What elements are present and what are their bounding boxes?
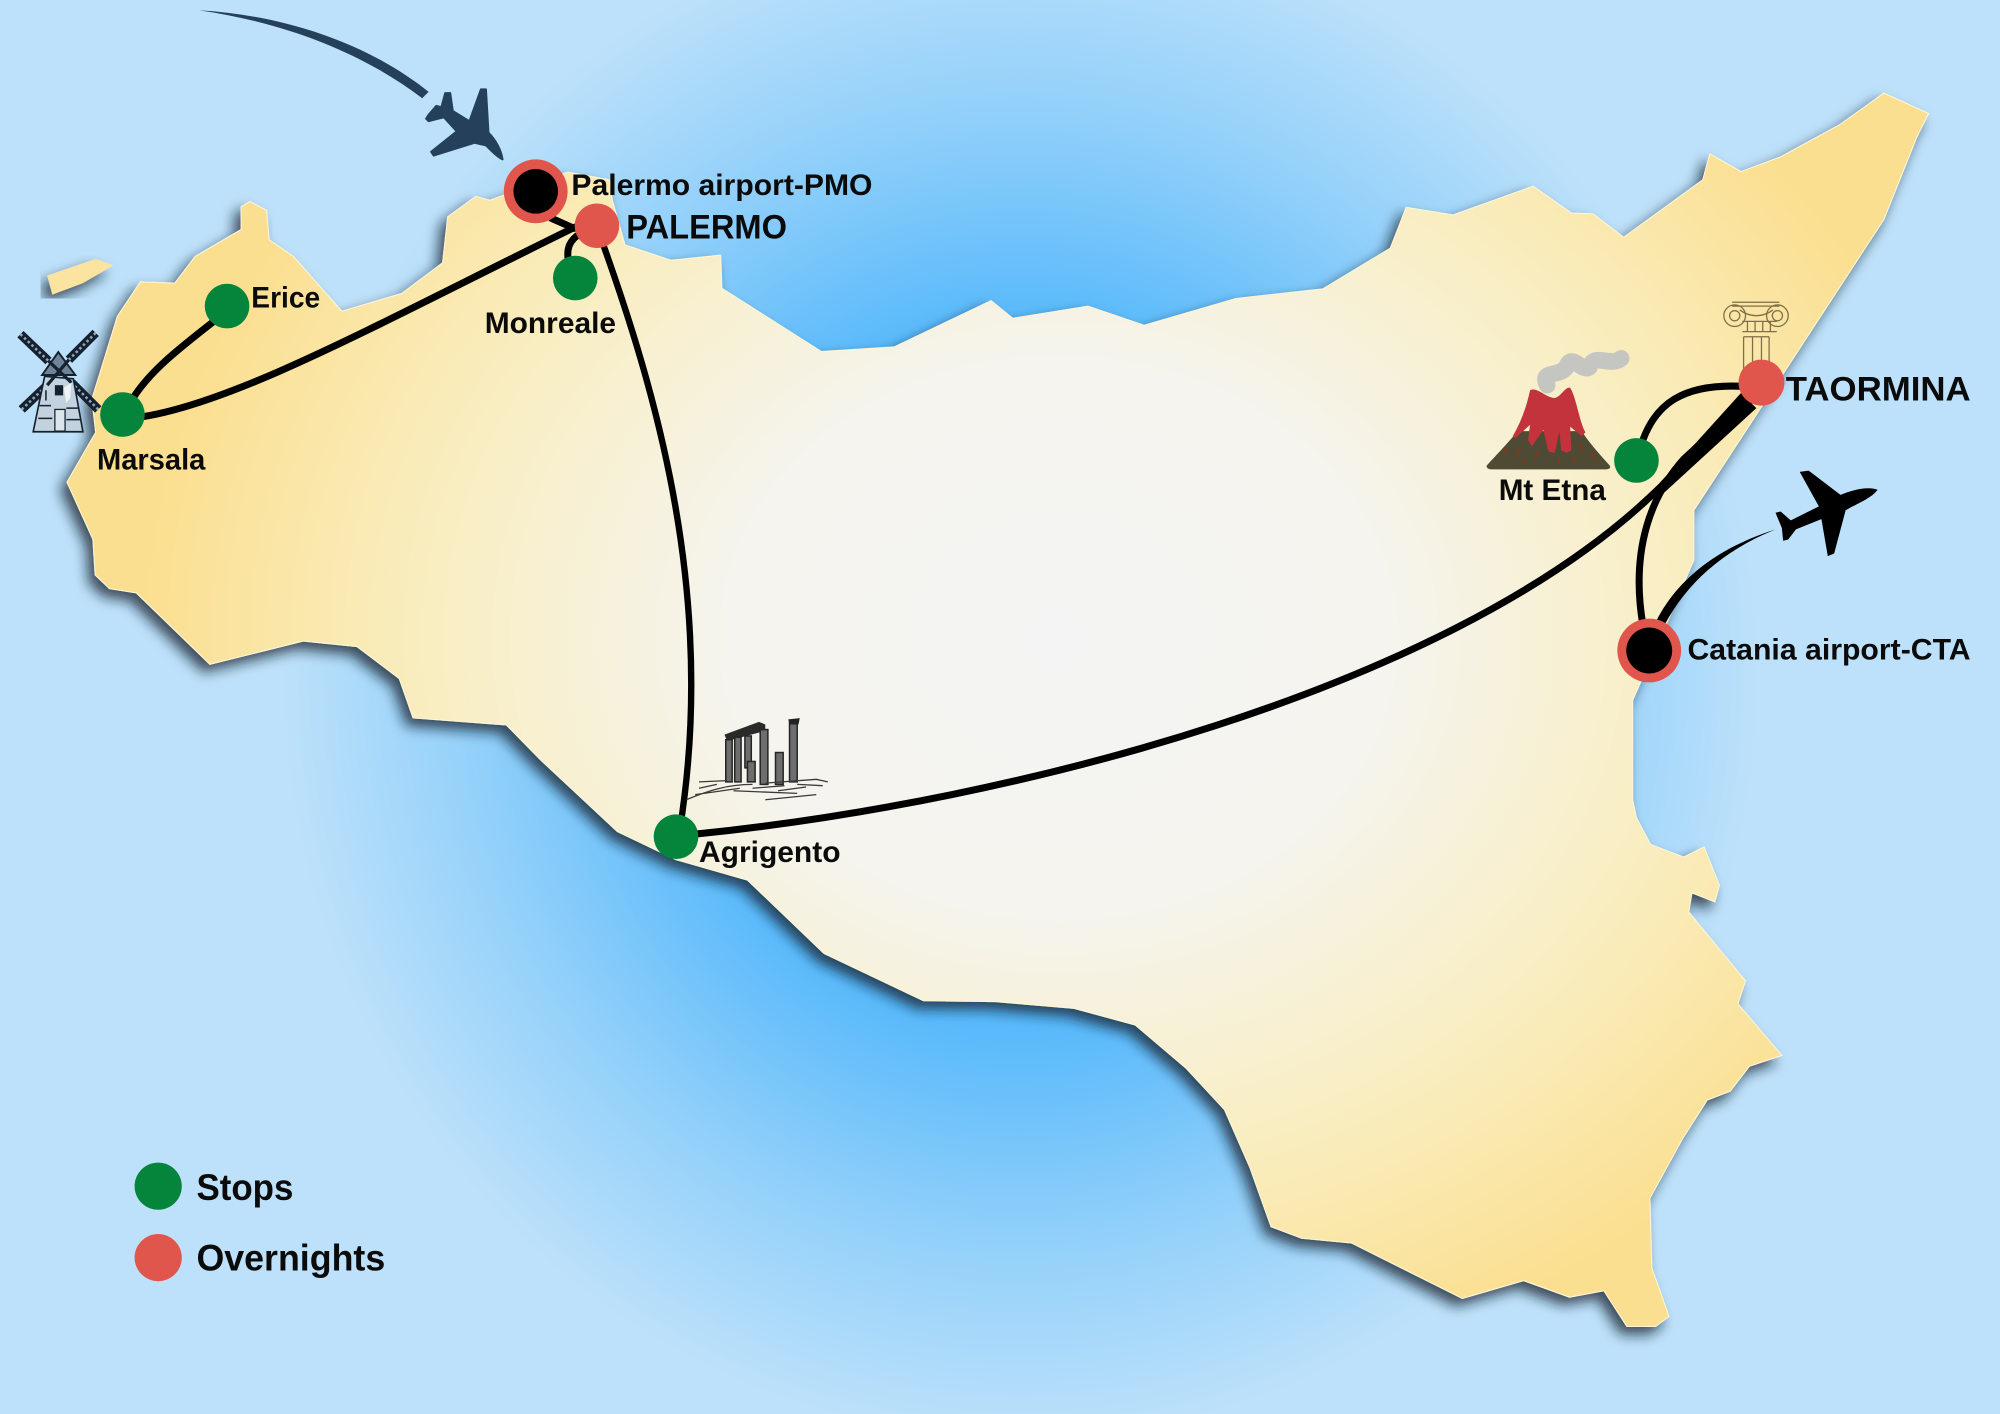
- marker: Catania airport: [1617, 619, 1681, 682]
- legend: overnights: [135, 1234, 385, 1281]
- legend: overnights: Overnights: [196, 1237, 385, 1278]
- marker: Palermo overnight: [575, 203, 619, 248]
- label: Monreale: Monreale: [485, 307, 616, 340]
- icon: windmill at Marsala: [20, 333, 98, 432]
- legend: stops: Stops: [196, 1167, 293, 1208]
- label: Erice: Erice: [251, 281, 320, 314]
- map: small island off the west coast: [47, 259, 114, 295]
- marker: Marsala stop: [100, 392, 145, 437]
- label: Catania airport: Catania airport-CTA: [1687, 633, 1971, 666]
- route: Catania to Taormina: [1639, 398, 1750, 625]
- icon: plane arriving at Palermo: [426, 89, 503, 159]
- label: Palermo: PALERMO: [626, 209, 787, 247]
- marker: Palermo airport: [504, 159, 568, 223]
- flight trail: departing Catania: [1657, 529, 1775, 625]
- label: Taormina: TAORMINA: [1786, 371, 1971, 409]
- marker: Erice stop: [205, 284, 249, 328]
- label: Palermo airport: Palermo airport-PMO: [571, 169, 872, 202]
- route: Palermo to Agrigento: [603, 245, 691, 829]
- route: merged wedge near Taormina: [1658, 393, 1756, 492]
- label: Marsala: Marsala: [97, 443, 206, 476]
- route: Marsala to Palermo: [140, 227, 575, 417]
- route: Monreale to Palermo: [568, 233, 580, 260]
- route: Palermo airport to Palermo: [551, 218, 574, 228]
- label: Agrigento: Agrigento: [699, 836, 841, 869]
- route: Mt Etna to Taormina: [1643, 386, 1745, 440]
- icon: Greek temple ruins at Agrigento: [686, 718, 828, 800]
- route: Marsala to Erice: [134, 319, 217, 397]
- marker: Monreale stop: [553, 256, 598, 300]
- label: Mt Etna: Mt Etna: [1499, 474, 1607, 507]
- legend: stops: [135, 1163, 293, 1210]
- routes: itinerary lines: [134, 218, 1756, 834]
- icon: plane departing Catania: [1775, 471, 1878, 556]
- marker: Agrigento stop: [654, 814, 698, 859]
- marker: Mt Etna stop: [1614, 438, 1659, 483]
- route: Agrigento to Taormina: [695, 398, 1753, 834]
- flight trail: arriving at Palermo: [199, 10, 429, 98]
- icon: Ionic column at Taormina: [1724, 302, 1788, 370]
- marker: Taormina overnight: [1739, 360, 1784, 406]
- legend: [135, 1163, 385, 1281]
- icon: Mt Etna volcano: [1487, 358, 1621, 469]
